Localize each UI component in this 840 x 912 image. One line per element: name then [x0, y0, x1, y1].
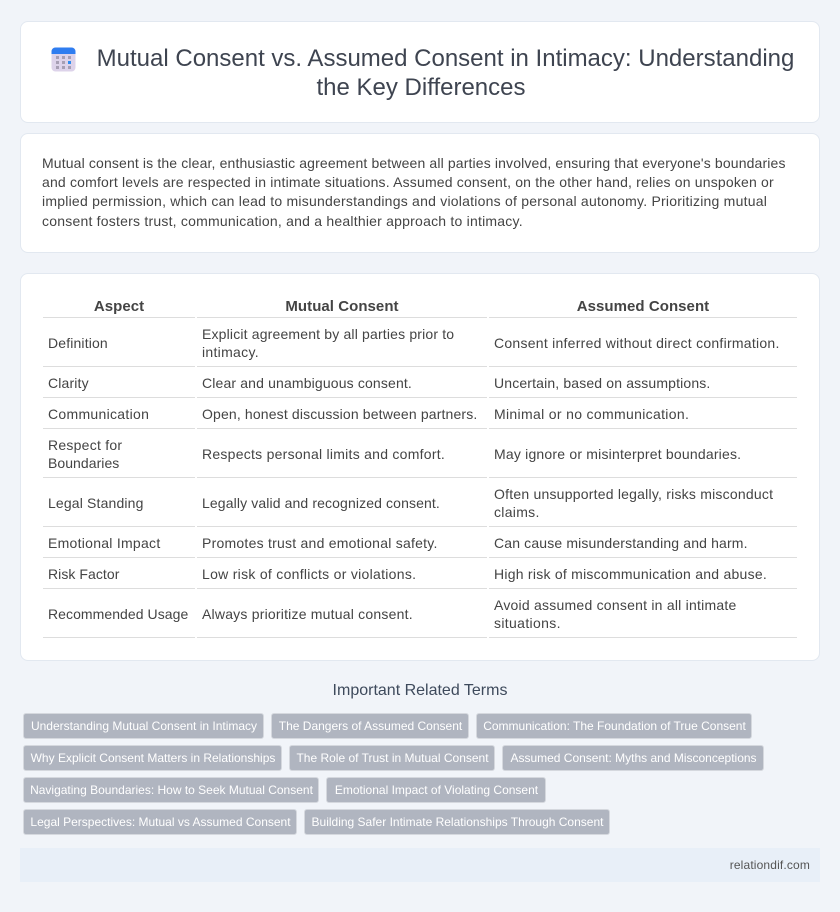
title: the Key Differences: [316, 74, 526, 101]
comparison table: May ignore or misinterpret boundaries.: [494, 446, 741, 462]
comparison table: Assumed Consent: [577, 298, 709, 315]
tag: [23, 745, 282, 771]
panel: introduction: [20, 133, 820, 253]
icon: calendar: [52, 48, 76, 72]
heading: related terms: Important Related Terms: [333, 682, 507, 699]
comparison table: Aspect: [94, 298, 144, 315]
tag: Understanding Mutual Consent in Intimacy: [31, 719, 257, 733]
comparison table: Recommended Usage: [48, 606, 188, 622]
tag: [289, 745, 495, 771]
tag: Legal Perspectives: Mutual vs Assumed Consent: [30, 815, 291, 829]
tag: The Role of Trust in Mutual Consent: [296, 751, 489, 765]
comparison table: Communication: [48, 406, 149, 422]
comparison table: Risk Factor: [48, 566, 119, 582]
comparison table: Mutual Consent: [285, 298, 399, 315]
tag: The Dangers of Assumed Consent: [279, 719, 462, 733]
comparison table: Boundaries: [48, 455, 119, 471]
footer source text: relationdif.com: [730, 858, 810, 872]
tag: [23, 713, 264, 739]
tag: [304, 809, 610, 835]
comparison table: Promotes trust and emotional safety.: [202, 535, 438, 551]
title: Mutual Consent vs. Assumed Consent in Intimacy: Understanding: [97, 45, 794, 72]
comparison table: Clear and unambiguous consent.: [202, 375, 412, 391]
comparison table: Open, honest discussion between partners.: [202, 406, 477, 422]
tag list: related terms: [23, 713, 764, 835]
tag: [271, 713, 469, 739]
text block: introduction: and comfort levels are respected in intimate situations. Assumed consent, on the other hand, relies on unspoken or: [42, 174, 774, 190]
tag: Navigating Boundaries: How to Seek Mutual Consent: [30, 783, 313, 797]
comparison table: situations.: [494, 615, 561, 631]
comparison table: Minimal or no communication.: [494, 406, 689, 422]
comparison table: [43, 298, 797, 638]
footer: [20, 848, 820, 882]
text block: introduction: consent fosters trust, communication, and a healthier approach to intimacy.: [42, 213, 523, 229]
comparison table: Can cause misunderstanding and harm.: [494, 535, 748, 551]
comparison table: Legal Standing: [48, 495, 144, 511]
comparison table: Consent inferred without direct confirmation.: [494, 335, 780, 351]
title: [97, 45, 794, 101]
comparison table: intimacy.: [202, 344, 259, 360]
tag: [23, 809, 297, 835]
comparison table: Definition: [48, 335, 108, 351]
comparison table: High risk of miscommunication and abuse.: [494, 566, 767, 582]
text block: introduction: Mutual consent is the clear, enthusiastic agreement between all parties involved, ensuring that everyone's boundaries: [42, 155, 786, 171]
text block: introduction: implied permission, which can lead to misunderstandings and violations of personal autonomy. Prioritizing mutual: [42, 193, 767, 209]
tag: [326, 777, 546, 803]
tag: Communication: The Foundation of True Consent: [483, 719, 746, 733]
tag: [502, 745, 764, 771]
comparison table: Avoid assumed consent in all intimate: [494, 597, 736, 613]
comparison table: claims.: [494, 504, 540, 520]
panel: comparison table: [20, 273, 820, 661]
tag: [476, 713, 752, 739]
tag: Emotional Impact of Violating Consent: [335, 783, 538, 797]
tag: [23, 777, 319, 803]
tag: Why Explicit Consent Matters in Relationships: [31, 751, 275, 765]
comparison table: Explicit agreement by all parties prior to: [202, 326, 454, 342]
panel: title card: [20, 21, 820, 123]
comparison table: Low risk of conflicts or violations.: [202, 566, 416, 582]
comparison table: Respects personal limits and comfort.: [202, 446, 445, 462]
comparison table: Emotional Impact: [48, 535, 160, 551]
comparison table: Clarity: [48, 375, 89, 391]
tag: Building Safer Intimate Relationships Through Consent: [312, 815, 603, 829]
tag: Assumed Consent: Myths and Misconceptions: [510, 751, 757, 765]
comparison table: Often unsupported legally, risks misconduct: [494, 486, 773, 502]
text block: introduction: [42, 155, 786, 229]
comparison table: Legally valid and recognized consent.: [202, 495, 440, 511]
comparison table: Uncertain, based on assumptions.: [494, 375, 710, 391]
comparison table: Respect for: [48, 437, 122, 453]
comparison table: Always prioritize mutual consent.: [202, 606, 413, 622]
